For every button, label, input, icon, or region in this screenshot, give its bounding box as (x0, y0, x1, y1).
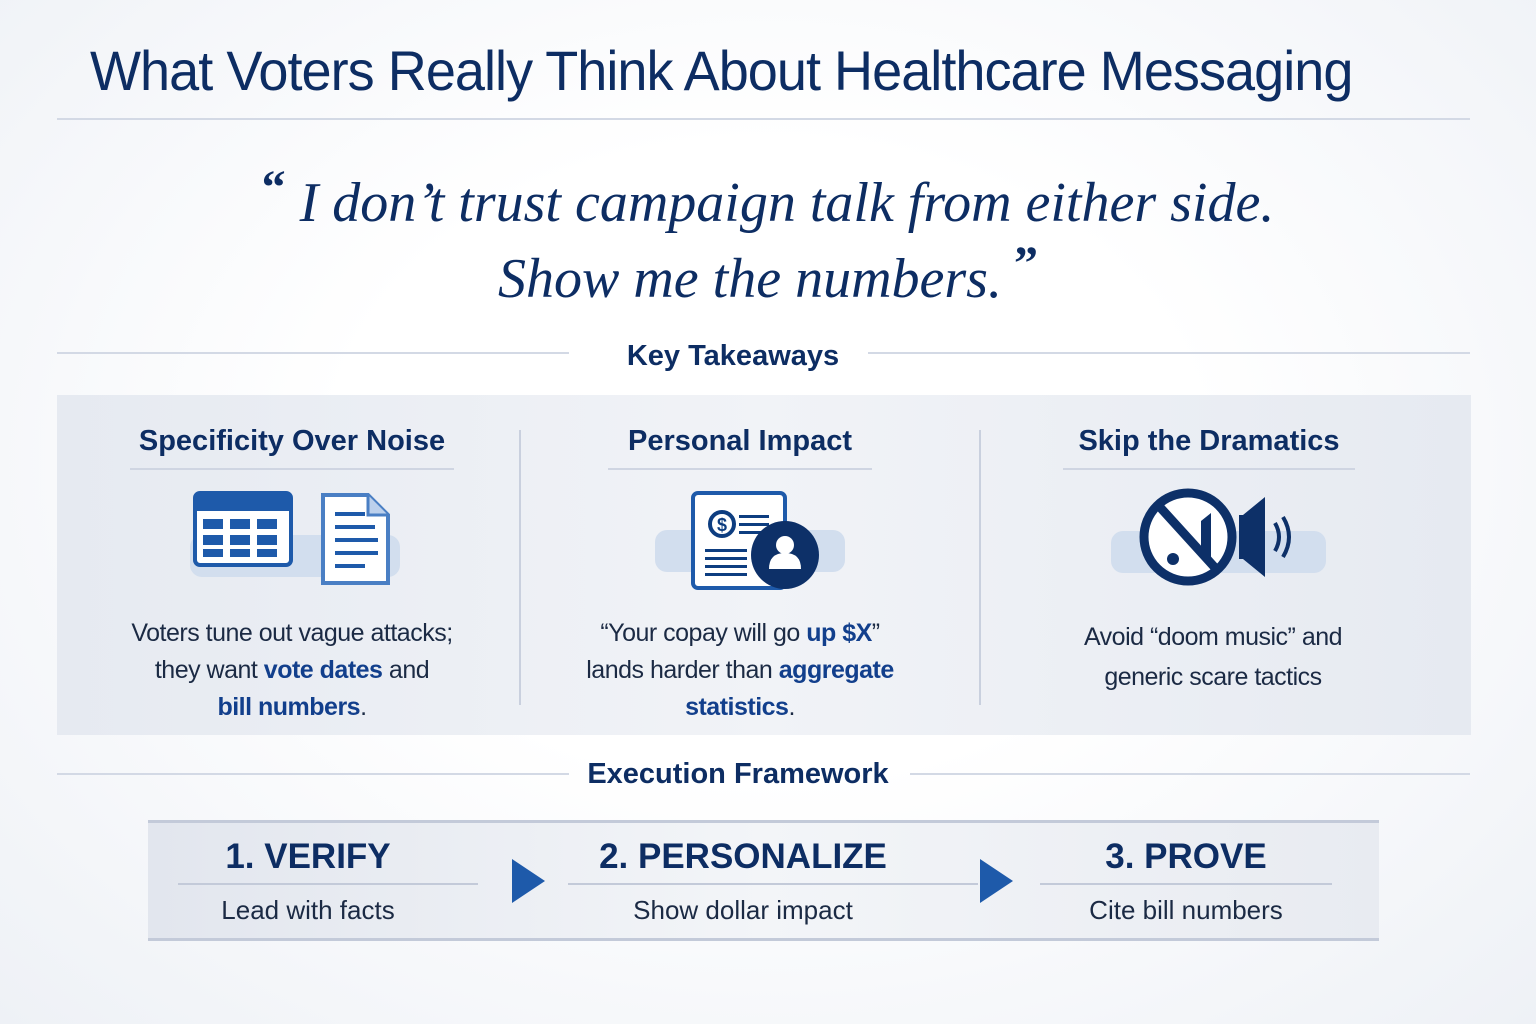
step 3: 3. PROVE (1105, 837, 1267, 876)
quote: “ I don’t trust campaign talk from either side. (262, 161, 1274, 234)
heading: Specificity Over Noise (139, 425, 445, 457)
quote: Show me the numbers. ” (498, 237, 1038, 310)
step 1: 1. VERIFY (225, 837, 391, 876)
text (131, 619, 453, 721)
step 2 (568, 837, 978, 925)
step 3 (1040, 837, 1332, 925)
panel: takeaways (57, 395, 1471, 735)
step 1: Lead with facts (221, 895, 395, 925)
text: “Your copay will go up $X” (600, 619, 880, 647)
column 2 (586, 425, 894, 721)
text: lands harder than aggregate (586, 656, 894, 684)
step 3: Cite bill numbers (1089, 895, 1283, 925)
icon: calendar and document (190, 491, 400, 585)
column 1 (130, 425, 454, 721)
heading: Skip the Dramatics (1078, 425, 1340, 457)
heading: execution framework: Execution Framework (587, 758, 889, 790)
step 2: Show dollar impact (633, 895, 853, 925)
icon: bill with person: $ (717, 515, 727, 535)
text: they want vote dates and (155, 656, 429, 684)
text: Avoid “doom music” and (1084, 623, 1342, 651)
heading (608, 425, 872, 470)
text: statistics. (685, 693, 795, 721)
arrow 1 (512, 859, 545, 903)
heading: key takeaways: Key Takeaways (627, 340, 839, 372)
step 1 (178, 837, 478, 925)
text: bill numbers. (217, 693, 367, 721)
text (586, 619, 894, 721)
heading (1063, 425, 1355, 470)
quote (262, 161, 1274, 310)
arrow 2 (980, 859, 1013, 903)
framework band (148, 820, 1379, 941)
text: Voters tune out vague attacks; (131, 619, 453, 647)
step 2: 2. PERSONALIZE (599, 837, 887, 876)
heading (130, 425, 454, 470)
text (1084, 623, 1342, 691)
column 3 (1063, 425, 1355, 691)
icon: bill with person (655, 491, 845, 590)
heading: Personal Impact (628, 425, 852, 457)
text: generic scare tactics (1104, 663, 1322, 691)
icon: no speaker (1111, 488, 1326, 586)
title: What Voters Really Think About Healthcare Messaging (90, 39, 1352, 102)
